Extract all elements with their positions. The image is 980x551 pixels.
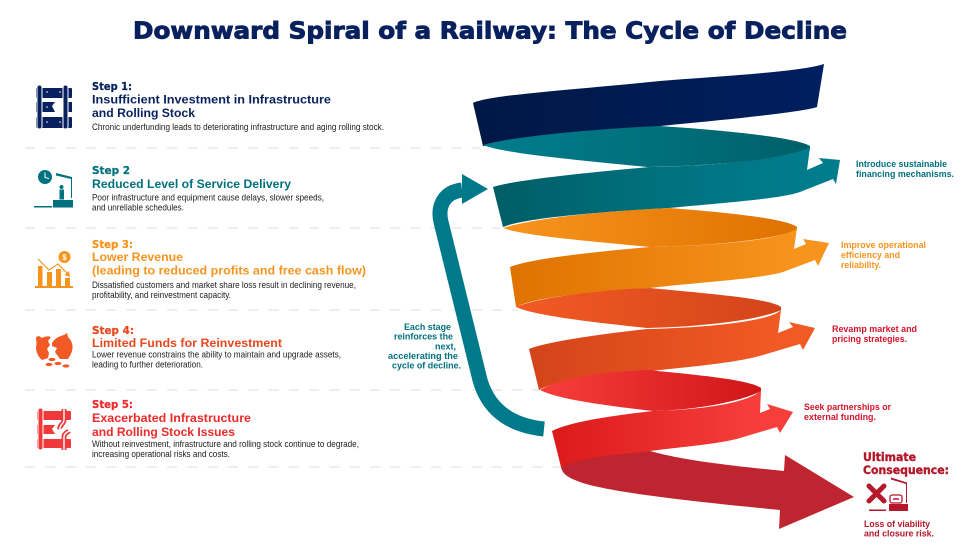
remedy: pricing: Revamp market and (832, 324, 917, 334)
spiral: cycle of decline (473, 64, 854, 529)
icon: closed station (869, 478, 908, 511)
step 1 heading: Step 1: (92, 80, 132, 93)
panel: step 1 (36, 80, 384, 132)
step 4 heading: Step 4: (92, 324, 134, 337)
step 4 heading (92, 324, 282, 350)
icon: falling revenue chart (35, 251, 73, 288)
spiral underside: orange-red (516, 288, 781, 328)
step 3 heading: Lower Revenue (92, 250, 183, 264)
step 1 description: Chronic underfunding leads to deteriorating infrastructure and aging rolling stock. (92, 122, 384, 132)
remedy: partnerships: Seek partnerships or (804, 402, 891, 412)
remedy: financing (856, 159, 954, 179)
consequence heading: Ultimate (863, 450, 916, 464)
consequence heading: Consequence: (863, 463, 949, 477)
step 4 description (92, 350, 341, 370)
step 3 description (92, 280, 356, 300)
step 4 heading: Limited Funds for Reinvestment (92, 336, 282, 350)
feedback arrow (440, 174, 544, 429)
step 3 heading (92, 238, 366, 278)
consequence heading (863, 450, 949, 477)
step 5 heading: and Rolling Stock Issues (92, 425, 235, 439)
icon: broken piggy bank (36, 333, 73, 368)
step 5 description (92, 439, 359, 459)
callout: reinforcing cycle (388, 322, 461, 370)
remedy: pricing: pricing strategies. (832, 334, 907, 344)
remedy: financing: Introduce sustainable (856, 159, 947, 169)
spiral band: navy (473, 64, 824, 146)
spiral band and arrow: teal (493, 147, 840, 227)
step 2 heading: Step 2 (92, 164, 130, 177)
icon: broken railway track (37, 408, 71, 450)
remedy: efficiency: reliability. (841, 260, 881, 270)
step 5 description: Without reinvestment, infrastructure and rolling stock continue to degrade, (92, 439, 359, 449)
step 5 description: increasing operational risks and costs. (92, 449, 230, 459)
callout: reinforcing cycle: reinforces the (394, 332, 453, 342)
step 5 heading: Exacerbated Infrastructure (92, 411, 251, 425)
step 4 description: Lower revenue constrains the ability to maintain and upgrade assets, (92, 350, 341, 360)
icon: railway track (36, 85, 72, 129)
remedy: financing: financing mechanisms. (856, 169, 954, 179)
step 2 description: and unreliable schedules. (92, 202, 184, 212)
spiral underside: orange (503, 208, 797, 247)
spiral band and arrow: orange-red (529, 310, 815, 390)
panel: step 2 (34, 164, 324, 212)
spiral underside: red (540, 370, 761, 411)
step 3 heading: (leading to reduced profits and free cash flow) (92, 264, 366, 278)
step 3 description: profitability, and reinvestment capacity. (92, 290, 231, 300)
step 1 heading (92, 80, 331, 120)
remedy: efficiency: efficiency and (841, 250, 900, 260)
consequence description: Loss of viability (864, 519, 931, 529)
title: Downward Spiral of a Railway: The Cycle of Decline (133, 16, 847, 44)
remedy: efficiency: Improve operational (841, 240, 926, 250)
panel: ultimate consequence (863, 450, 949, 538)
icon: falling revenue chart: $ (62, 253, 67, 262)
callout: reinforcing cycle: next, (435, 342, 456, 352)
step 3 description: Dissatisfied customers and market share loss result in declining revenue, (92, 280, 356, 290)
callout: reinforcing cycle: Each stage (404, 322, 451, 332)
step 2 description: Poor infrastructure and equipment cause delays, slower speeds, (92, 192, 324, 202)
consequence description (864, 519, 934, 538)
final arrow: dark red (561, 451, 854, 529)
callout: reinforcing cycle: cycle of decline. (392, 360, 461, 370)
remedy: pricing (832, 324, 917, 344)
panel: step 5 (37, 398, 359, 459)
callout: reinforcing cycle: accelerating the (388, 351, 458, 361)
step 3 heading: Step 3: (92, 238, 133, 251)
step 5 heading: Step 5: (92, 398, 133, 411)
step 2 heading: Reduced Level of Service Delivery (92, 177, 291, 191)
step 5 heading (92, 398, 251, 439)
panel: step 4 (36, 324, 341, 370)
step 2 heading (92, 164, 291, 191)
remedy: efficiency (841, 240, 926, 270)
consequence description: and closure risk. (864, 528, 934, 538)
remedy: partnerships: external funding. (804, 412, 876, 422)
step 1 heading: and Rolling Stock (92, 106, 195, 120)
spiral band and arrow: orange (510, 228, 829, 307)
panel: step 3 (35, 238, 366, 300)
remedy: partnerships (804, 402, 891, 422)
step 2 description (92, 192, 324, 212)
spiral underside: teal (483, 126, 810, 167)
step 4 description: leading to further deterioration. (92, 360, 203, 370)
icon: clock and platform (34, 170, 73, 208)
spiral band and arrow: red (552, 390, 793, 467)
step 1 heading: Insufficient Investment in Infrastructure (92, 92, 331, 106)
